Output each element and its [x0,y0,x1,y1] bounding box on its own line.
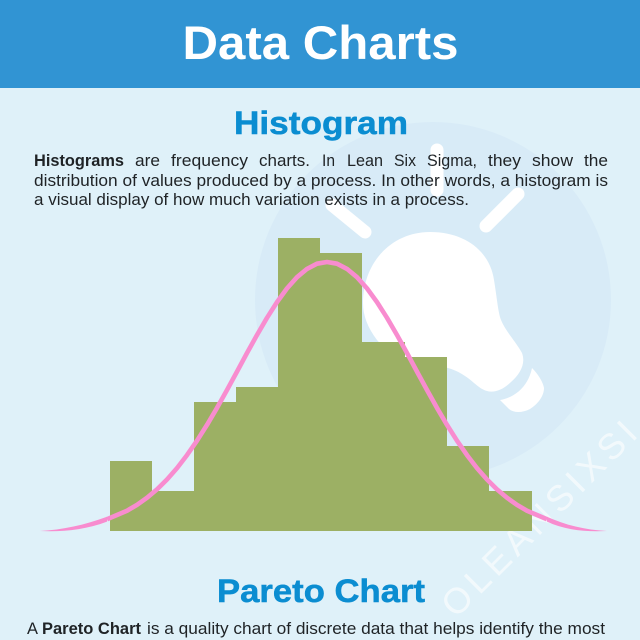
histogram description: they [488,151,522,170]
watermark: light bulb logo [255,122,611,478]
histogram description: Sigma, [427,151,477,170]
histogram description: charts. [259,151,310,170]
histogram chart [40,238,607,531]
header banner [0,0,640,88]
histogram description: frequency [171,151,249,170]
normal distribution curve [40,262,607,531]
heading: pareto chart: Pareto Chart [217,573,425,609]
histogram description: In [322,151,335,170]
histogram description: Lean [347,151,383,170]
pareto description: is a quality chart of discrete data that helps identify the most [147,619,605,638]
histogram description: distribution of values produced by a process. In other words, a histogram is [34,171,608,190]
pareto description: Pareto Chart [42,619,141,638]
histogram description: are [135,151,160,170]
histogram description [34,151,608,209]
histogram description: Six [394,151,416,170]
pareto description: A [27,619,39,638]
histogram description: a visual display of how much variation exists in a process. [34,190,469,209]
title: Data Charts [182,16,458,69]
histogram bars [110,238,532,531]
histogram description: show [532,151,574,170]
histogram description: the [584,151,608,170]
histogram description: Histograms [34,151,124,170]
heading: histogram: Histogram [234,105,408,141]
